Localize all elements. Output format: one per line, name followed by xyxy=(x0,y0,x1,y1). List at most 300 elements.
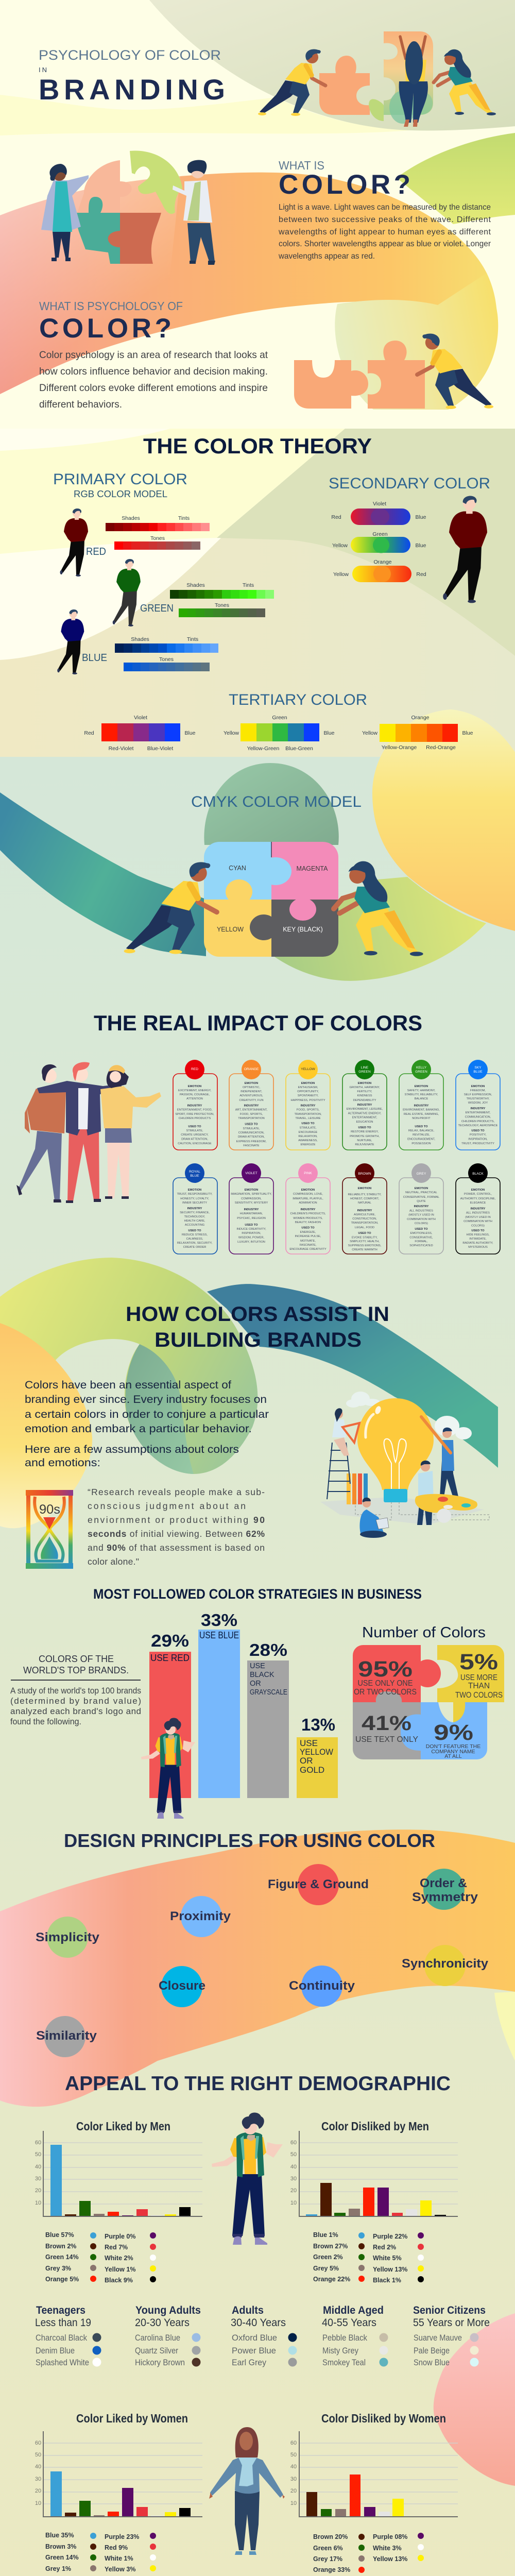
card brown: INDUSTRY xyxy=(357,1209,372,1212)
middle aged: 40-55 Years xyxy=(322,2317,376,2329)
card line green: INDUSTRY xyxy=(357,1104,372,1107)
bar blue: 33% xyxy=(201,1611,237,1630)
card grey: (MOSTLY USED IN xyxy=(408,1214,434,1217)
senior citizens xyxy=(413,2304,490,2367)
hero pale yellow band xyxy=(0,95,410,135)
card line green: PROMOTE GROWTH, xyxy=(350,1135,380,1138)
card royal blue: TRUST, RESPONSIBILITY, xyxy=(177,1193,213,1196)
card orange: INDEPENDENT, xyxy=(241,1090,262,1093)
heading: number of colors: Number of Colors xyxy=(362,1624,486,1641)
card orange: ORANGE xyxy=(244,1067,259,1071)
legend: Orange 33% xyxy=(313,2566,350,2573)
card orange: TRANSPORTATION xyxy=(238,1117,265,1120)
card black: MYSTERIOUS xyxy=(468,1246,488,1249)
text block: what is psychology of color: different behaviors. xyxy=(39,399,122,410)
chart: color disliked by women: 20 xyxy=(290,2488,297,2494)
chart: color disliked by women: Color Disliked by Women xyxy=(321,2412,446,2425)
card royal blue: RELAXATION, SECURITY, xyxy=(177,1242,213,1245)
card royal blue: ACCOUNTING xyxy=(185,1224,204,1227)
bar violet xyxy=(84,715,196,752)
card royal blue: HONESTY, LOYALTY, xyxy=(180,1197,209,1200)
card orange: CREATIVITY, FUN xyxy=(239,1099,264,1102)
legend: Grey 5% xyxy=(313,2265,339,2272)
chart: color disliked by men xyxy=(290,2120,458,2284)
text block: branding intro: and emotions: xyxy=(25,1457,100,1469)
card sky blue: WISDOM, JOY xyxy=(468,1101,488,1105)
chart: color disliked by women: 40 xyxy=(290,2464,297,2470)
card line green xyxy=(342,1060,387,1150)
title: PSYCHOLOGY OF COLOR xyxy=(39,47,221,63)
card pink: IMMATURE, PLAYFUL, xyxy=(293,1197,323,1200)
text block: what is color: between two successive peaks of the wave. Different xyxy=(279,215,491,224)
legend: Green 14% xyxy=(45,2554,79,2561)
captions: USE TEXT ONLY xyxy=(355,1735,418,1744)
card violet: PSYCHIC, RELIGION xyxy=(237,1217,266,1220)
card black: INDUSTRY xyxy=(471,1208,486,1211)
legend: Purple 22% xyxy=(373,2233,407,2240)
card violet: INDUCE CREATIVITY, xyxy=(236,1228,266,1231)
blue group: Tints xyxy=(187,636,198,642)
card yellow: HAPPINESS, POSITIVITY xyxy=(290,1099,325,1102)
heading: most followed: MOST FOLLOWED COLOR STRATEGIES IN BUSINESS xyxy=(93,1586,422,1602)
card brown: CREATE WARMTH xyxy=(352,1248,377,1251)
icon: rainbow hourglass: 90s xyxy=(39,1502,60,1517)
friend in yellow hoodie xyxy=(100,1065,161,1199)
card red: ATTENTION xyxy=(186,1097,203,1100)
card brown: SIMPLICITY, HEALTH, xyxy=(350,1240,380,1243)
adults: Oxford Blue xyxy=(232,2333,277,2343)
title xyxy=(39,47,225,106)
card royal blue: EMOTION xyxy=(188,1189,201,1192)
pushing man xyxy=(417,333,493,409)
heading secondary: SECONDARY COLOR xyxy=(329,475,490,492)
pencils xyxy=(347,1473,368,1504)
card red: USED TO xyxy=(188,1125,201,1128)
panel: secondary color xyxy=(329,475,490,603)
illustration: three friends xyxy=(16,1062,161,1203)
card line green: KINDNESS xyxy=(357,1094,372,1097)
card pink: BEAUTY, FASHION xyxy=(295,1221,321,1224)
legend xyxy=(45,2532,156,2576)
legend: Brown 27% xyxy=(313,2243,348,2250)
card sky blue: SELF EXPRESSION, xyxy=(464,1093,492,1096)
card yellow: TRANSPORTATION, xyxy=(294,1113,322,1116)
yellow piece xyxy=(437,1645,504,1702)
card pink: FASCINATE, xyxy=(300,1244,317,1247)
card orange: OPTIMISTIC, xyxy=(243,1086,260,1089)
text block: research quote: enviornment or product withing 90 xyxy=(88,1515,265,1525)
card yellow: EMOTION xyxy=(301,1082,315,1085)
card yellow: YELLOW xyxy=(301,1067,316,1071)
card royal blue: TECHNOLOGY, xyxy=(184,1215,205,1218)
teenagers: Teenagers xyxy=(36,2304,85,2316)
card brown xyxy=(342,1163,387,1254)
card brown: SUPPRESS EMOTIONS, xyxy=(348,1244,382,1247)
card line green: EMOTION xyxy=(358,1082,371,1085)
card sky blue: ENTERTAINMENT, xyxy=(466,1111,491,1114)
card violet: WISDOM, POWER, xyxy=(238,1236,265,1240)
puzzle and pushing man, lower right xyxy=(294,333,493,409)
heading: how colors assist: BUILDING BRANDS xyxy=(154,1329,362,1351)
card black: BLACK xyxy=(472,1172,484,1176)
yellow piece xyxy=(204,900,271,957)
section 3 background xyxy=(0,757,515,2576)
card sky blue: TECHNOLOGY, AEROSPACE xyxy=(458,1124,498,1127)
pill green: Yellow xyxy=(332,543,348,549)
text block: top brands study: WORLD'S TOP BRANDS. xyxy=(23,1665,129,1675)
text block: research quote: color alone." xyxy=(88,1556,139,1567)
legend: Yellow 1% xyxy=(105,2266,135,2273)
green arc xyxy=(273,877,486,981)
text block: what is color: WHAT IS xyxy=(279,159,324,172)
legend: White 3% xyxy=(373,2545,402,2552)
proximity xyxy=(170,1896,231,1937)
card black xyxy=(456,1163,500,1254)
teal swoosh xyxy=(207,1284,498,1468)
puzzle: number of colors xyxy=(353,1645,504,1759)
blue group: Tones xyxy=(159,656,174,663)
bar black grayscale: 28% xyxy=(249,1640,287,1659)
card line green: EDUCATION xyxy=(356,1121,373,1124)
head puzzle pink xyxy=(77,160,132,213)
bar black grayscale: OR xyxy=(250,1680,261,1688)
card kelly green: ENCOURAGEMENT, xyxy=(407,1138,435,1141)
card yellow: STIMULATE, xyxy=(299,1126,317,1129)
puzzle seam xyxy=(271,842,272,857)
young adults xyxy=(135,2304,201,2367)
bar black grayscale: BLACK xyxy=(250,1671,274,1679)
card pink: EMOTION xyxy=(301,1189,315,1192)
text block: top brands study: (determined by brand value) xyxy=(10,1696,141,1706)
bar black grayscale: GRAYSCALE xyxy=(250,1688,287,1697)
green group xyxy=(113,559,274,626)
adults: Earl Grey xyxy=(232,2358,266,2367)
card orange: ART, ENTERTAINMENT, xyxy=(235,1109,268,1112)
captions: USE ONLY ONE xyxy=(357,1679,413,1688)
card violet: HUMANITARIAN, xyxy=(240,1212,263,1215)
senior citizens: Snow Blue xyxy=(414,2358,450,2367)
teal band xyxy=(0,792,206,956)
legend: Red 9% xyxy=(105,2544,128,2551)
bar violet: Red-Violet xyxy=(109,745,133,752)
card grey: COMBINATION WITH xyxy=(407,1218,436,1221)
pink blob xyxy=(434,2313,515,2486)
card pink: USED TO xyxy=(301,1226,315,1229)
chart: color liked by women: 10 xyxy=(35,2500,41,2506)
legend: Blue 1% xyxy=(313,2231,338,2239)
yellow notch xyxy=(453,1702,465,1722)
card kelly green: EMOTION xyxy=(415,1085,428,1088)
card black: HIDE FEELINGS, xyxy=(467,1233,490,1236)
card kelly green: KELLY xyxy=(416,1066,427,1070)
order and symmetry xyxy=(412,1869,478,1910)
card kelly green: REVITALIZE, xyxy=(413,1133,430,1137)
legend: Green 14% xyxy=(45,2253,79,2261)
text block: research quote: and 90% of that assessment is based on xyxy=(88,1543,265,1553)
chart: color liked by women: 60 xyxy=(35,2440,41,2446)
bar yellow gold: 13% xyxy=(301,1715,335,1734)
card line green: ENVIRONMENT, LEISURE, xyxy=(347,1108,383,1111)
text block: top brands study: analyzed each brand's logo and xyxy=(10,1706,141,1716)
card violet xyxy=(229,1163,273,1254)
card royal blue xyxy=(173,1163,217,1254)
card line green: RESTORE ENERGY, xyxy=(351,1130,379,1133)
chart: color disliked by women xyxy=(290,2412,458,2573)
bar yellow gold: USE xyxy=(300,1738,318,1748)
chart: color liked by men: 30 xyxy=(35,2176,41,2182)
card red: PASSION, COURAGE, xyxy=(180,1093,210,1096)
adults: Adults xyxy=(232,2304,264,2316)
closure xyxy=(159,1966,205,2007)
text block: what is color: wavelengths appear as red. xyxy=(278,252,375,261)
captions: COMPANY NAME xyxy=(431,1749,475,1755)
card orange: EMOTION xyxy=(245,1082,258,1085)
middle aged: Pebble Black xyxy=(322,2333,367,2343)
card sky blue: USED TO xyxy=(471,1129,485,1132)
card black: POWER, CONTROL, xyxy=(464,1193,492,1196)
card sky blue: INDUSTRY xyxy=(471,1107,486,1110)
card royal blue: CREATE ORDER xyxy=(183,1246,206,1249)
cyan piece xyxy=(204,842,271,900)
card kelly green: NON-PROFIT xyxy=(412,1117,431,1120)
legend: White 1% xyxy=(105,2555,133,2562)
bar red: USE RED xyxy=(150,1653,190,1663)
chart: color liked by men: 50 xyxy=(35,2151,41,2158)
card yellow: ENTHUSIASM, xyxy=(298,1086,318,1089)
pill violet xyxy=(331,501,426,525)
man figure center xyxy=(212,2112,285,2245)
text block: top brands study xyxy=(10,1654,141,1726)
title: BRANDING xyxy=(39,73,225,106)
bar green: Yellow xyxy=(224,730,239,736)
bar red: 29% xyxy=(151,1631,189,1650)
card sky blue: FREEDOM, xyxy=(470,1089,486,1092)
chart: color disliked by men: 50 xyxy=(290,2151,297,2158)
card brown: BROWN xyxy=(358,1172,371,1176)
clouds xyxy=(346,1392,380,1408)
senior citizens: 55 Years or More xyxy=(413,2317,490,2329)
card orange: FOOD, SPORTS, xyxy=(240,1113,263,1116)
panel: impact cards xyxy=(173,1060,500,1254)
red group xyxy=(60,509,210,577)
card sky blue: INSPIRATION, xyxy=(468,1138,488,1141)
card yellow: ENERGIZE xyxy=(300,1143,316,1146)
bar red xyxy=(149,1631,191,1798)
card violet: USED TO xyxy=(245,1224,258,1227)
card kelly green: GREEN xyxy=(415,1070,427,1074)
card black: (MOSTLY USED IN xyxy=(465,1216,491,1219)
icon: rainbow hourglass xyxy=(26,1490,73,1569)
blue group xyxy=(57,609,218,674)
card pink: INCREASE PULSE, xyxy=(295,1235,321,1238)
card violet: INDUSTRY xyxy=(244,1208,259,1211)
card red: SPORT, FIRE PROTECTION, xyxy=(175,1113,214,1116)
friend in navy jacket xyxy=(37,1062,122,1203)
teenagers: Denim Blue xyxy=(36,2346,75,2355)
heading: how colors assist xyxy=(126,1303,389,1351)
card grey: GREY xyxy=(417,1172,426,1176)
blue piece xyxy=(401,1702,487,1759)
chart: color disliked by women: 50 xyxy=(290,2452,297,2458)
panel: primary color xyxy=(53,471,274,674)
heading: cmyk: CMYK COLOR MODEL xyxy=(191,793,362,810)
darker green region xyxy=(217,429,515,656)
card pink: MOTIVATE, xyxy=(300,1240,316,1243)
card black: COMBINATION WITH xyxy=(464,1220,492,1223)
card black: AUTHORITY, DISCIPLINE, xyxy=(460,1197,496,1200)
bar green: Blue xyxy=(323,730,335,736)
shadow platform xyxy=(320,1497,484,1525)
legend: Yellow 13% xyxy=(373,2555,407,2563)
card brown: EVOKE STABILITY, xyxy=(352,1236,377,1240)
card brown: AGRICULTURE, xyxy=(354,1213,375,1216)
woman figure center xyxy=(209,2427,285,2555)
man in maroon xyxy=(443,496,487,603)
age groups: men xyxy=(35,2304,490,2367)
page background: cream hero xyxy=(0,0,515,429)
bar chart: logo colors xyxy=(149,1611,338,1798)
card sky blue: TRUST, PRODUCTIVITY xyxy=(461,1142,494,1145)
heading tertiary: TERTIARY COLOR xyxy=(229,691,367,708)
card orange: USED TO xyxy=(245,1123,258,1126)
card line green: GREEN xyxy=(358,1070,371,1074)
pill orange xyxy=(333,559,426,582)
sitting man xyxy=(359,1498,389,1538)
percentages: 41% xyxy=(362,1712,411,1735)
percentages: 95% xyxy=(358,1657,413,1682)
captions: TWO COLORS xyxy=(455,1691,503,1700)
legend: Green 6% xyxy=(313,2545,343,2552)
bar green xyxy=(224,715,335,752)
card pink: ENCOURAGE CREATIVITY xyxy=(289,1248,327,1251)
card sky blue: POSITIVITY, xyxy=(470,1133,486,1137)
card red: DRAW ATTENTION, xyxy=(181,1138,208,1141)
card orange: EXPRESS FREEDOM, xyxy=(236,1140,267,1143)
card red: EMOTION xyxy=(188,1085,201,1088)
similarity: Similarity xyxy=(36,2029,97,2043)
text block: top brands study: COLORS OF THE xyxy=(39,1654,114,1664)
card violet: SENSITIVITY, MYSTERY xyxy=(235,1201,268,1205)
chart: color liked by men: 20 xyxy=(35,2188,41,2194)
card sky blue: COMMUNICATION, xyxy=(465,1116,491,1119)
puzzle piece rainbow xyxy=(384,31,433,115)
bar orange: Yellow xyxy=(362,730,377,736)
teenagers: Splashed White xyxy=(36,2358,89,2367)
text block: what is psychology of color: WHAT IS PSYCHOLOGY OF xyxy=(39,299,183,313)
card yellow: FOOD, SPORTS, xyxy=(297,1109,320,1112)
pill orange: Red xyxy=(416,571,426,578)
legend: Black 9% xyxy=(105,2277,133,2284)
card yellow: USED TO xyxy=(301,1122,315,1125)
card line green: NURTURE, xyxy=(357,1139,372,1142)
figure and ground: Figure & Ground xyxy=(268,1877,369,1891)
chart: color liked by women: 50 xyxy=(35,2452,41,2458)
figure and ground xyxy=(268,1864,369,1905)
green group: Shades xyxy=(186,582,205,588)
chart: color liked by women xyxy=(35,2412,202,2576)
pill orange: Orange xyxy=(373,559,392,565)
card black: ALL INDUSTRIES xyxy=(466,1212,490,1215)
bar orange: Orange xyxy=(411,715,430,721)
legend xyxy=(313,2533,424,2573)
sitting woman with ruler xyxy=(332,1408,359,1456)
card black: USED TO xyxy=(471,1229,485,1232)
text block: research quote xyxy=(88,1487,265,1567)
bar yellow gold: GOLD xyxy=(300,1765,324,1775)
card red: EXCITEMENT, ENERGY, xyxy=(178,1089,211,1092)
card black: COLORS) xyxy=(471,1224,485,1227)
legend: Purple 23% xyxy=(105,2533,139,2540)
red group: Shades xyxy=(122,515,140,521)
pale yellow-green blob xyxy=(335,273,498,410)
man pushing xyxy=(258,49,325,116)
legend: Brown 20% xyxy=(313,2533,348,2540)
dashed wires xyxy=(355,1502,489,1520)
pill green: Green xyxy=(372,531,388,537)
text block: branding intro: branding ever since. Every industry focuses on xyxy=(25,1394,267,1405)
green dome xyxy=(204,763,339,845)
card sky blue: SKY xyxy=(474,1066,482,1070)
section 2 background xyxy=(0,429,515,757)
card brown: HONEST, COMFORT, xyxy=(350,1197,379,1200)
captions xyxy=(354,1673,503,1759)
legend: Purple 0% xyxy=(105,2233,135,2240)
small bulb xyxy=(437,1509,451,1523)
card line green: USED TO xyxy=(358,1126,371,1129)
man standing xyxy=(417,1461,434,1525)
card royal blue: USED TO xyxy=(188,1229,201,1232)
chart: color disliked by men: Color Disliked by Men xyxy=(321,2120,429,2133)
section: what is color illustration xyxy=(41,151,215,265)
card brown: EMOTION xyxy=(358,1187,371,1190)
text block: branding intro: a certain colors in order to conjure a particular xyxy=(25,1409,269,1420)
right puzzle piece xyxy=(368,341,425,409)
piece labels: CYAN xyxy=(229,865,246,872)
bulb xyxy=(357,1398,434,1490)
card sky blue: TRUSTWORTHY, xyxy=(467,1097,490,1100)
man in white coat xyxy=(173,160,215,265)
woman from behind xyxy=(399,37,428,127)
red group: Tints xyxy=(178,515,190,521)
bar yellow gold xyxy=(297,1715,338,1798)
senior citizens: Pale Beige xyxy=(414,2346,450,2355)
card grey: QUITE xyxy=(417,1200,426,1203)
heading: real impact: THE REAL IMPACT OF COLORS xyxy=(94,1011,422,1035)
card royal blue: CALMNESS, xyxy=(186,1238,203,1241)
card orange: DRAW ATTENTION, xyxy=(238,1136,265,1139)
senior citizens: Senior Citizens xyxy=(413,2304,486,2316)
pill violet: Violet xyxy=(373,501,386,507)
hero background swoosh xyxy=(149,0,515,130)
percentages: 9% xyxy=(434,1720,473,1745)
card grey: COLORS) xyxy=(415,1222,428,1225)
card red: CHILDREN PRODUCTS xyxy=(179,1117,211,1120)
captions: USE MORE xyxy=(460,1673,497,1682)
young adults: Young Adults xyxy=(135,2304,201,2316)
card yellow: OPPORTUNITY, xyxy=(297,1090,319,1093)
piece labels: KEY (BLACK) xyxy=(283,926,323,933)
yellow knob xyxy=(226,879,252,904)
teenagers xyxy=(35,2304,101,2367)
heading: how colors assist: HOW COLORS ASSIST IN xyxy=(126,1303,389,1326)
bar blue: USE BLUE xyxy=(199,1630,239,1640)
card orange: ADVENTUROUS, xyxy=(239,1094,263,1097)
card pink: CHILDREN'S PRODUCTS, xyxy=(290,1212,326,1215)
text block: research quote: seconds of initial viewing. Between 62% xyxy=(88,1529,265,1539)
card yellow: AWARENESS, xyxy=(298,1139,318,1142)
text block: research quote: conscious judgment about an xyxy=(88,1501,246,1511)
synchronicity xyxy=(402,1945,489,1986)
